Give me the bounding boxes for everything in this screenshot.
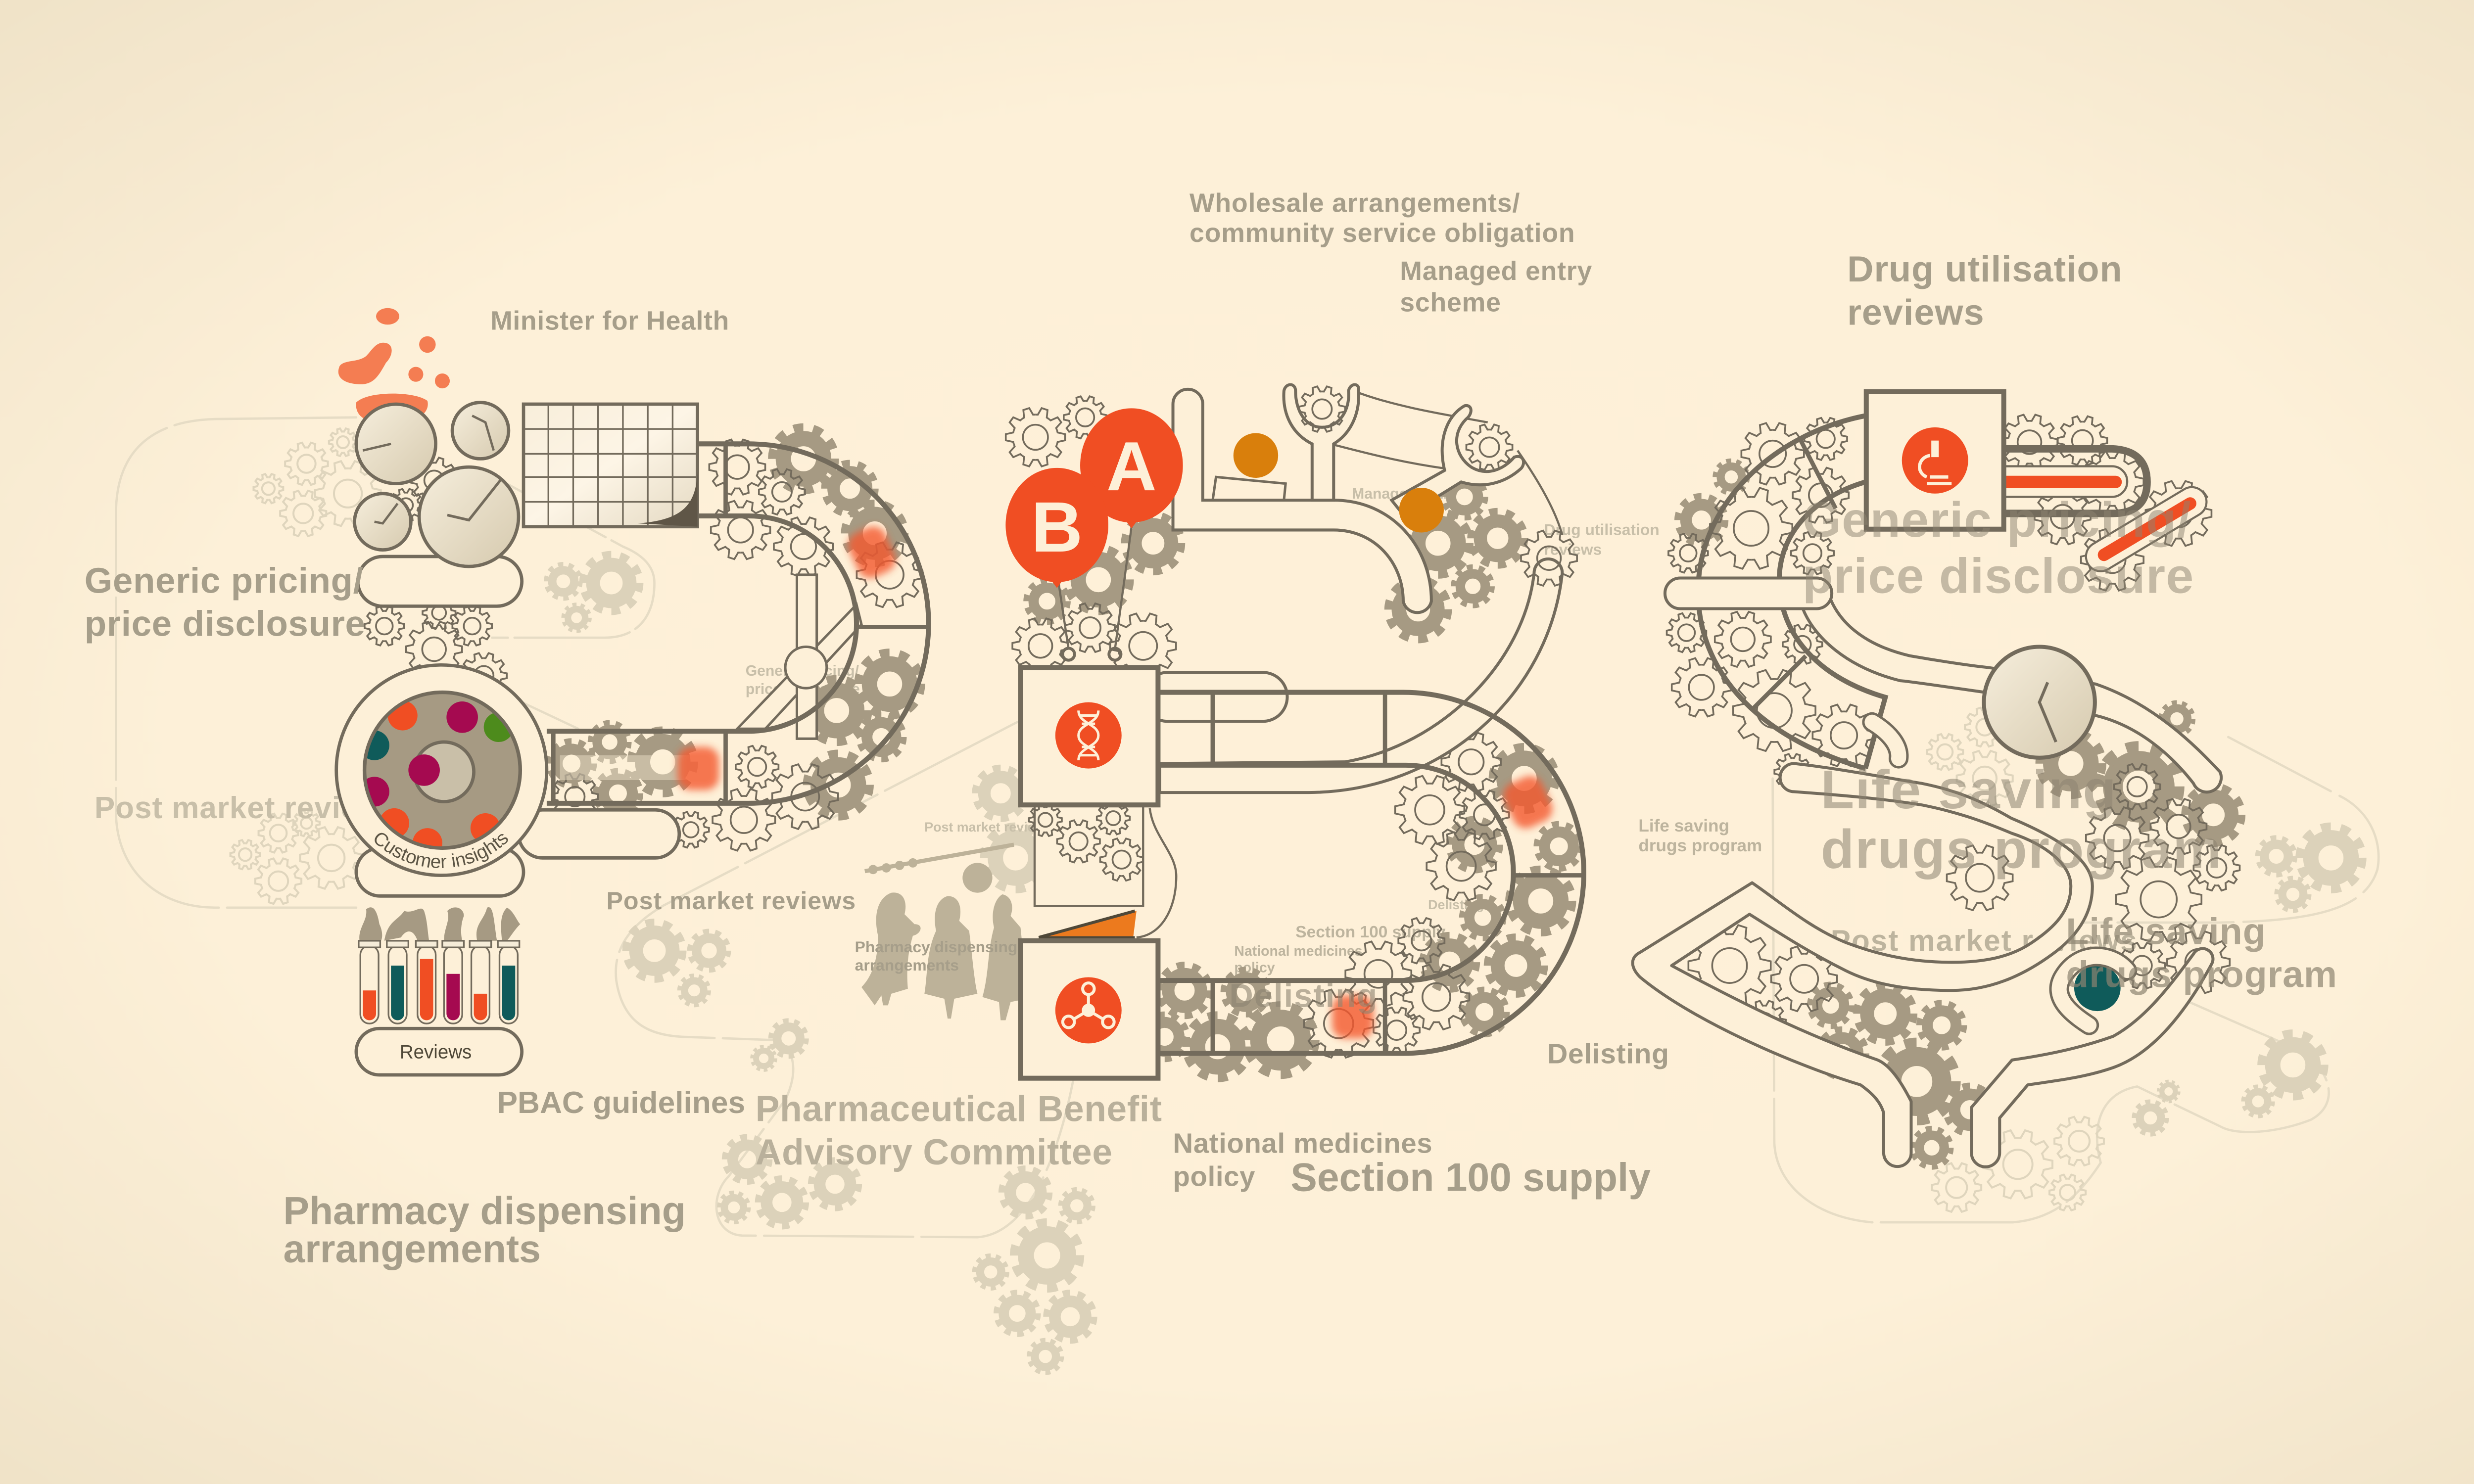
- faded label: Post market reviews small: Post market reviews: [924, 820, 1052, 835]
- label: PBAC guidelines: PBAC guidelines: [497, 1086, 745, 1120]
- box on pipe: [1213, 477, 1285, 500]
- horizontal pill: [1665, 578, 1832, 608]
- dark belt: [2004, 449, 2147, 513]
- faded label: Managed small: Managed entry: [1352, 486, 1457, 502]
- B rails: [1158, 693, 1584, 1053]
- connecting wires: [1333, 391, 1562, 535]
- inner S gear: [1947, 844, 2013, 912]
- smoke above tubes: [359, 907, 520, 941]
- faded label: Generic pricing small: Generic pricing/: [746, 663, 859, 679]
- teal hook: [2059, 957, 2127, 1025]
- heading: Drug utilisation reviews: reviews: [1847, 291, 1985, 332]
- S filled gears: [1678, 461, 2241, 1167]
- label: Delisting: Delisting: [1547, 1038, 1669, 1070]
- box with microscope icon: [1866, 392, 2004, 529]
- heading: Wholesale arrangements: community service obligation: [1189, 219, 1575, 248]
- B outline gears: [1006, 395, 1509, 1059]
- label: Post market reviews middle: Post market reviews: [606, 887, 856, 915]
- S rails: [1698, 416, 1885, 769]
- pill under customer insights: [356, 848, 523, 896]
- orange ball two: [1399, 488, 1444, 532]
- letter B: [1005, 385, 1584, 1078]
- box with DNA icon: [1020, 667, 1158, 805]
- orange ball one: [1234, 433, 1278, 478]
- pill under clocks: [358, 556, 522, 606]
- overlay label: Generic pricing on S: Generic pricing/: [1803, 492, 2191, 548]
- faded label: National medicines small: National medicines: [1234, 943, 1363, 959]
- label: Pharmaceutical Benefit Advisory Committee: Advisory Committee: [756, 1132, 1113, 1172]
- P filled gears: [550, 428, 920, 816]
- S outline gears: [1667, 414, 2240, 1044]
- customer insights dial: Customer insights: [375, 833, 508, 868]
- faded label: Generic pricing small: price disclosure: [746, 681, 860, 697]
- overlay label: Life saving drugs program large: drugs program: [1821, 819, 2223, 880]
- S bottom right pipe: [1971, 949, 2213, 1167]
- calendar grid: [523, 404, 698, 527]
- label: Pharmacy dispensing arrangements: arrangements: [284, 1227, 541, 1270]
- red marker bottom: [1332, 995, 1374, 1038]
- balloon A: A: [1106, 427, 1157, 505]
- red marker lower: [677, 747, 719, 790]
- red marker right: [1499, 772, 1557, 833]
- balloon strings: [1059, 527, 1132, 660]
- faded label: Pharmacy dispensing small: Pharmacy dispensing: [855, 938, 1017, 956]
- pipe cap gear: [1521, 529, 1577, 587]
- P rails: [547, 444, 929, 803]
- red marker upper: [844, 522, 900, 582]
- overlay label: Delisting on B: Delisting: [1229, 977, 1378, 1015]
- top L-shaped pipe: [1173, 389, 1431, 612]
- label: Life saving small: drugs program: [1638, 836, 1762, 855]
- faded label: Pharmacy dispensing small: arrangements: [855, 956, 959, 974]
- label: National medicines policy: National medicines: [1173, 1127, 1432, 1159]
- wrench one: [1284, 385, 1359, 500]
- horizontal red gauge: [1988, 466, 2127, 497]
- balloon B: B: [1031, 487, 1083, 567]
- balloon A: [1080, 408, 1183, 528]
- overlay label: Life saving drugs program right: Life saving: [2066, 910, 2266, 952]
- label: Pharmacy dispensing arrangements: Pharmacy dispensing: [284, 1189, 686, 1232]
- teal dot: [2074, 965, 2121, 1011]
- faint contour lines: [116, 417, 2379, 1237]
- faded label: Section 100 small: Section 100 supply: [1295, 923, 1446, 941]
- faded label: Drug utilisation small: Drug utilisation: [1544, 520, 1660, 538]
- silhouettes of people: [861, 845, 1027, 1020]
- customer insights dial: [334, 663, 548, 877]
- big clock: [419, 467, 519, 566]
- box with molecule icon: [1020, 941, 1158, 1078]
- label: National medicines policy: policy: [1173, 1160, 1255, 1192]
- small hook tube: [1872, 722, 1899, 758]
- label: Generic pricing left: Generic pricing/: [85, 561, 364, 601]
- curved link line: [1137, 808, 1176, 937]
- overlay label: Life saving drugs program large: Life saving: [1821, 759, 2117, 820]
- splashes of orange: [338, 308, 450, 424]
- faded label: Post market reviews left: Post market reviews: [95, 791, 400, 825]
- test tubes: [359, 941, 520, 1023]
- clock on S: [1984, 647, 2095, 758]
- letter P: [334, 308, 949, 1076]
- heading: Managed entry scheme: Managed entry: [1400, 257, 1592, 286]
- label: Section 100 supply: Section 100 supply: [1290, 1155, 1651, 1200]
- S upper pipe: [1803, 600, 2221, 792]
- diagonal red gauge: [2101, 502, 2192, 556]
- faded label: Drug utilisation small: reviews: [1544, 541, 1602, 558]
- faint outline gears: [231, 428, 2104, 1213]
- P translucent band: [560, 755, 719, 780]
- faded label: Post market reviews S: Post market reviews: [1831, 924, 2138, 957]
- faint filled gears: [547, 556, 2362, 1373]
- small pill top of rails: [1143, 672, 1287, 721]
- open book: [1039, 911, 1137, 937]
- B filled gears: [1027, 476, 1581, 1077]
- lower thin pipe: [1160, 559, 1562, 792]
- faded label: National medicines small: policy: [1234, 960, 1275, 975]
- heading: Minister for Health: Minister for Health: [490, 306, 729, 335]
- label: Life saving small: Life saving: [1638, 816, 1729, 835]
- wrench two: [1391, 406, 1523, 517]
- P outline gears: [365, 438, 923, 852]
- reviews pill: [356, 1028, 522, 1075]
- faded label: Delisting small B: Delisting: [1428, 897, 1484, 912]
- P connector pipes: [737, 575, 861, 739]
- heading: Wholesale arrangements: Wholesale arrangements/: [1189, 189, 1520, 218]
- overlay label: Life saving drugs program right: drugs program: [2066, 954, 2337, 995]
- balloon B: [1005, 468, 1108, 588]
- paper with gears: [1029, 801, 1143, 906]
- heading: Managed entry scheme: scheme: [1400, 288, 1501, 317]
- clocks: [355, 403, 509, 550]
- heading: Drug utilisation reviews: Drug utilisation: [1847, 248, 2122, 289]
- S body pipe: [1633, 764, 2093, 1166]
- label: Pharmaceutical Benefit Advisory Committee: Pharmaceutical Benefit: [756, 1089, 1162, 1129]
- pill lower rail: [519, 810, 679, 858]
- letter S: [1633, 392, 2241, 1167]
- reviews pill: Reviews: [400, 1042, 472, 1063]
- overlay label: Generic pricing on S: price disclosure: [1803, 549, 2194, 604]
- label: Generic pricing left: price disclosure: [85, 604, 366, 644]
